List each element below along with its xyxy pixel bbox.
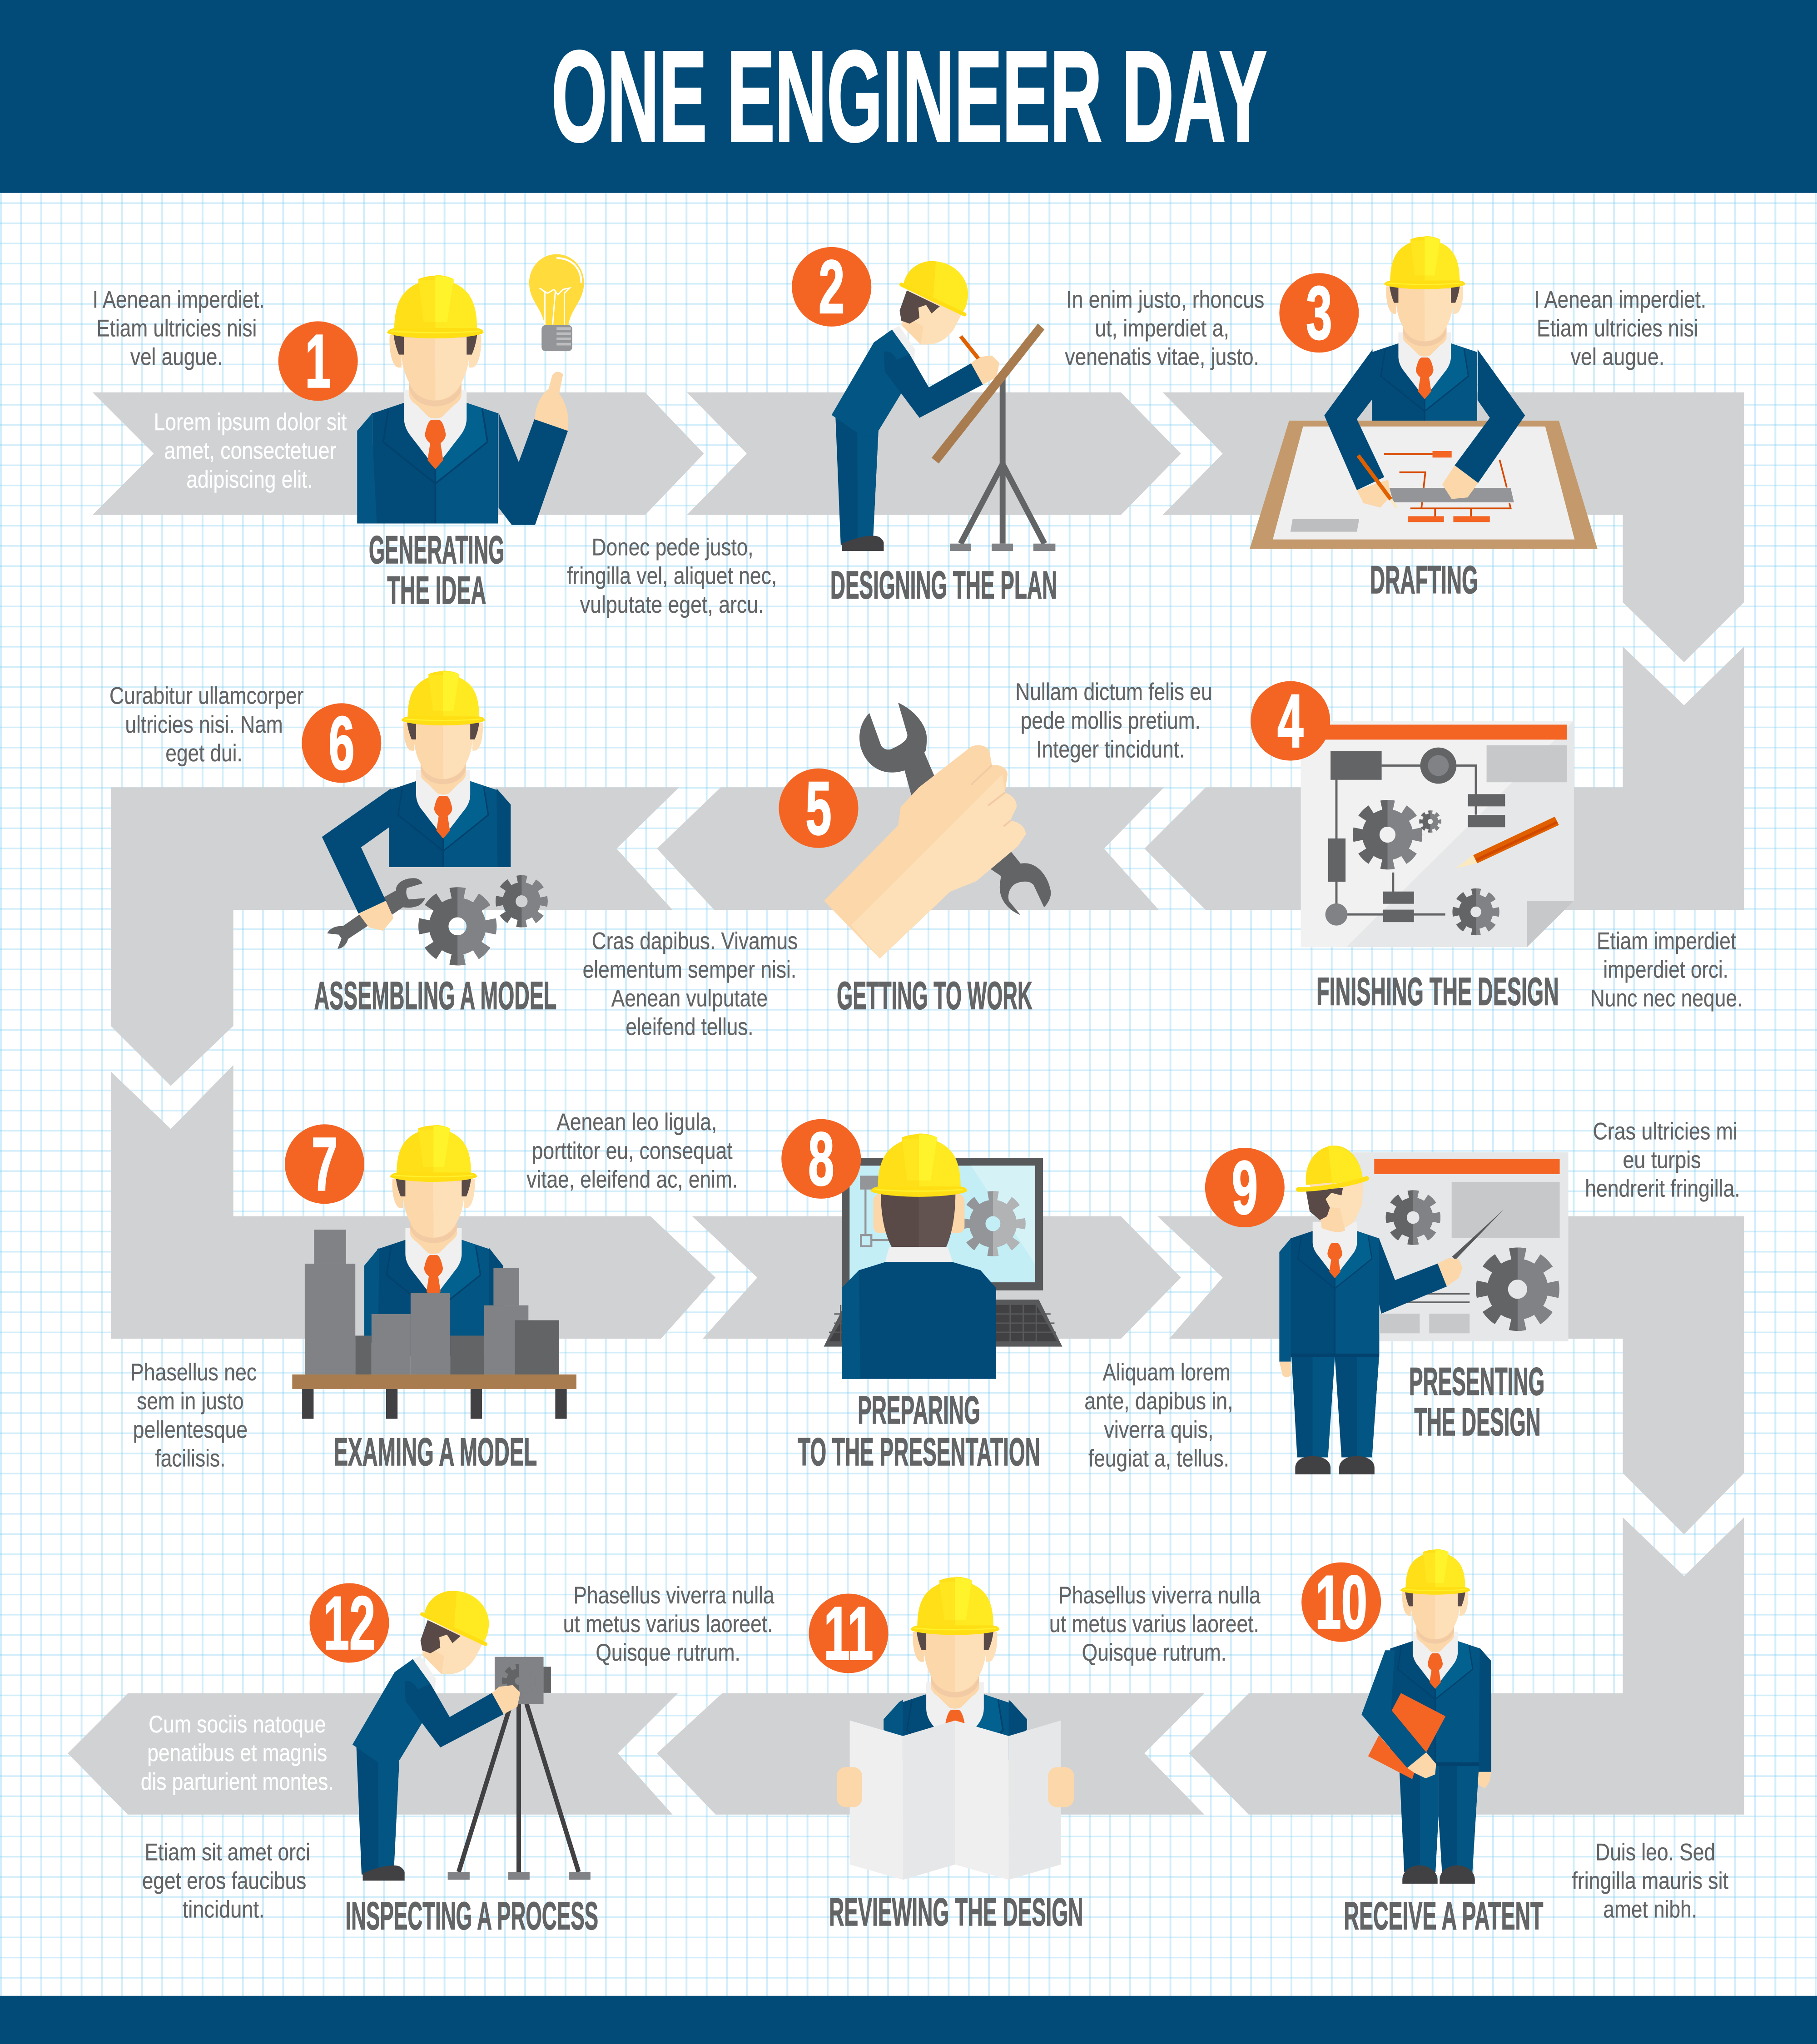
note: vel augue.	[1571, 344, 1664, 371]
note: eget dui.	[165, 740, 243, 767]
note: viverra quis,	[1104, 1416, 1213, 1443]
header band	[0, 0, 1817, 193]
note: Aliquam lorem	[1103, 1359, 1231, 1386]
step 6: assembling a model	[109, 670, 556, 1017]
note: Aenean leo ligula,	[556, 1109, 717, 1136]
step number badge 7: 7	[312, 1122, 338, 1206]
engineer with pointer	[1279, 1146, 1504, 1474]
note	[1015, 679, 1212, 763]
icon: light bulb	[529, 254, 584, 351]
step 4: finishing the design	[1251, 679, 1743, 1014]
note: Phasellus nec	[130, 1359, 257, 1386]
engineer with wrench and gears	[322, 670, 544, 968]
step 1: generating the idea	[93, 254, 777, 619]
step 2: designing the plan	[792, 245, 1264, 607]
note: hendrerit fringilla.	[1585, 1176, 1740, 1202]
note: eget eros faucibus	[142, 1867, 306, 1894]
note: Duis leo. Sed	[1595, 1839, 1715, 1865]
footer band	[0, 1996, 1817, 2044]
ribbon path	[68, 392, 1744, 1815]
engineer reading unfolded plan	[837, 1577, 1074, 1893]
heading	[369, 528, 504, 612]
heading: PREPARING	[858, 1389, 980, 1432]
step number badge 12: 12	[323, 1581, 375, 1665]
note: Phasellus viverra nulla	[574, 1582, 774, 1609]
note: Cras ultricies mi	[1593, 1118, 1738, 1145]
note: Nullam dictum felis eu	[1015, 679, 1212, 705]
note: Quisque rutrum.	[1082, 1639, 1226, 1666]
note: Etiam ultricies nisi	[1537, 315, 1698, 342]
note: Quisque rutrum.	[596, 1639, 740, 1666]
note: below	[567, 534, 777, 618]
note: below: Donec pede justo,	[592, 534, 754, 561]
heading: INSPECTING A PROCESS	[345, 1894, 598, 1938]
note on ribbon	[141, 1711, 334, 1795]
note: Phasellus viverra nulla	[1058, 1582, 1261, 1609]
note: imperdiet orci.	[1603, 956, 1728, 983]
note on ribbon: penatibus et magnis	[147, 1740, 327, 1766]
note: top left: vel augue.	[130, 344, 223, 371]
heading: ASSEMBLING A MODEL	[314, 974, 556, 1017]
step number badge 8: 8	[808, 1117, 834, 1201]
note: Cras dapibus. Vivamus	[592, 928, 798, 954]
note: Curabitur ullamcorper	[109, 683, 304, 709]
heading: THE IDEA	[387, 569, 486, 612]
note: top left	[93, 286, 264, 371]
step number badge 7	[285, 1122, 364, 1206]
note: on ribbon: adipiscing elit.	[186, 466, 313, 493]
step number badge 12	[309, 1581, 389, 1665]
heading: GENERATING	[369, 528, 504, 572]
heading: FINISHING THE DESIGN	[1316, 970, 1559, 1014]
note	[1065, 286, 1264, 371]
step number badge 4	[1251, 679, 1330, 763]
heading: TO THE PRESENTATION	[798, 1430, 1040, 1474]
step number badge 10	[1301, 1560, 1381, 1645]
hand gripping wrench	[824, 703, 1051, 959]
note: ut metus varius laoreet.	[1049, 1611, 1259, 1637]
step 3: drafting	[1250, 236, 1706, 602]
step 8: preparing to the presentation	[781, 1117, 1233, 1474]
engineer at drafting table	[1250, 236, 1598, 549]
note: tincidunt.	[183, 1896, 264, 1923]
step number badge 5	[779, 766, 859, 851]
heading	[1409, 1360, 1544, 1444]
note: sem in justo	[137, 1388, 244, 1414]
step number badge 6	[302, 701, 381, 785]
note: amet nibh.	[1603, 1896, 1697, 1923]
step number badge 3	[1279, 271, 1359, 355]
note	[1590, 928, 1743, 1012]
step 9: presenting the design	[1205, 1118, 1740, 1474]
engineer behind city model	[292, 1125, 576, 1434]
note: Etiam imperdiet	[1597, 928, 1736, 954]
heading: RECEIVE A PATENT	[1344, 1894, 1543, 1938]
note	[109, 683, 304, 767]
note: fringilla mauris sit	[1572, 1867, 1728, 1894]
note: below: fringilla vel, aliquet nec,	[567, 563, 777, 590]
step number badge 10: 10	[1315, 1560, 1367, 1645]
step number badge 8	[781, 1117, 861, 1201]
step number badge 5: 5	[805, 766, 832, 851]
step number badge 9: 9	[1232, 1146, 1258, 1230]
heading: GETTING TO WORK	[837, 974, 1033, 1017]
heading: PRESENTING	[1409, 1360, 1544, 1404]
step number badge 9	[1205, 1146, 1285, 1230]
step number badge 6: 6	[328, 701, 354, 785]
engineer at computer, rear view	[824, 1133, 1062, 1379]
note: Aenean vulputate	[611, 985, 768, 1012]
note: top left: Etiam ultricies nisi	[96, 315, 257, 342]
note	[1572, 1839, 1728, 1923]
note: ante, dapibus in,	[1084, 1388, 1233, 1414]
note	[526, 1109, 738, 1193]
step 7: examing a model	[130, 1109, 738, 1474]
note	[583, 928, 798, 1041]
blueprint sheet	[1291, 721, 1574, 947]
heading	[798, 1389, 1040, 1474]
title: ONE ENGINEER DAY	[551, 25, 1267, 169]
note: top left: I Aenean imperdiet.	[93, 286, 264, 313]
note on ribbon: Cum sociis natoque	[149, 1711, 326, 1738]
note: on ribbon	[154, 409, 347, 493]
note	[1049, 1582, 1261, 1666]
note: porttitor eu, consequat	[532, 1137, 733, 1164]
note: vitae, eleifend ac, enim.	[526, 1166, 738, 1193]
note	[1534, 286, 1706, 371]
note	[1585, 1118, 1740, 1202]
note	[142, 1839, 310, 1923]
note: ultricies nisi. Nam	[125, 711, 283, 738]
engineer holding orange folder	[1361, 1549, 1491, 1884]
step number badge 1: 1	[305, 319, 331, 403]
step number badge 2	[792, 245, 871, 329]
engineer with raised finger	[357, 275, 569, 525]
engineer at drawing stand	[832, 261, 1055, 551]
note: I Aenean imperdiet.	[1534, 286, 1706, 313]
step number badge 11: 11	[824, 1591, 874, 1676]
note on ribbon: dis parturient montes.	[141, 1768, 334, 1795]
step number badge 11	[809, 1591, 889, 1676]
heading: EXAMING A MODEL	[334, 1430, 537, 1474]
note: ut metus varius laoreet.	[563, 1611, 773, 1637]
note: In enim justo, rhoncus	[1066, 286, 1264, 313]
note: on ribbon: Lorem ipsum dolor sit	[154, 409, 347, 436]
heading: THE DESIGN	[1414, 1400, 1541, 1444]
step number badge 2: 2	[819, 245, 844, 329]
engineer with camera on tripod	[352, 1591, 591, 1880]
heading: REVIEWING THE DESIGN	[829, 1890, 1083, 1934]
note: venenatis vitae, justo.	[1065, 344, 1259, 371]
heading: DESIGNING THE PLAN	[830, 563, 1057, 607]
note: on ribbon: amet, consectetuer	[164, 437, 336, 464]
step number badge 3: 3	[1306, 271, 1332, 355]
note: facilisis.	[155, 1445, 225, 1472]
note: below: vulputate eget, arcu.	[580, 591, 764, 618]
presentation board	[1352, 1152, 1569, 1341]
step number badge 1	[278, 319, 358, 403]
note: feugiat a, tellus.	[1088, 1445, 1229, 1472]
note: pellentesque	[133, 1416, 248, 1443]
step 11: reviewing the design	[809, 1577, 1261, 1934]
heading: DRAFTING	[1370, 558, 1478, 602]
note	[563, 1582, 774, 1666]
note	[130, 1359, 257, 1472]
note	[1084, 1359, 1233, 1472]
step 12: inspecting a process	[141, 1581, 774, 1938]
note: eleifend tellus.	[626, 1014, 754, 1041]
note: eu turpis	[1623, 1146, 1701, 1173]
note: Nunc nec neque.	[1590, 985, 1743, 1012]
note: Etiam sit amet orci	[145, 1839, 310, 1865]
step 10: receive a patent	[1301, 1549, 1728, 1938]
note: elementum semper nisi.	[583, 956, 796, 983]
note: pede mollis pretium.	[1021, 707, 1201, 734]
note: ut, imperdiet a,	[1095, 315, 1229, 342]
note: Integer tincidunt.	[1036, 736, 1185, 763]
step number badge 4: 4	[1277, 679, 1303, 763]
step 5: getting to work	[583, 679, 1212, 1041]
